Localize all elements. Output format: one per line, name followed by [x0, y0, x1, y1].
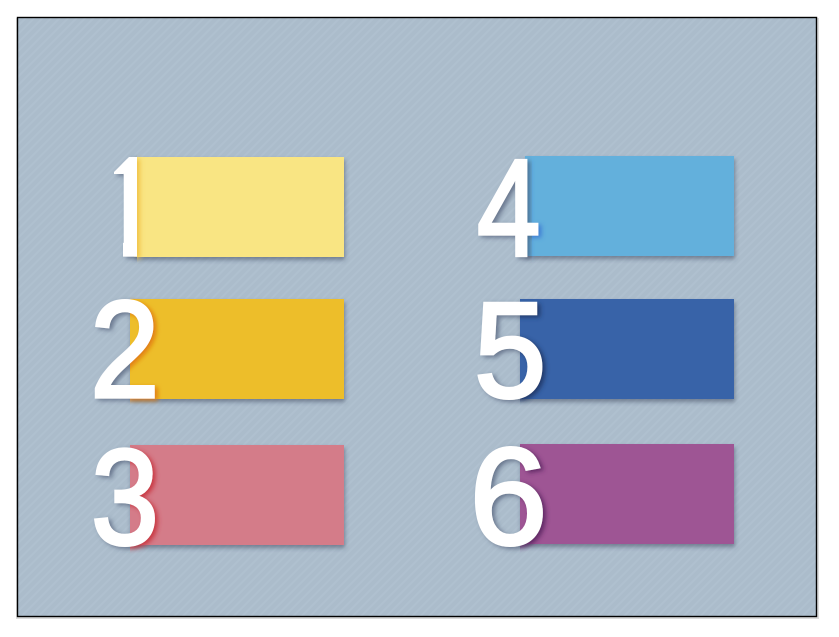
panel 2: golden yellow [130, 299, 344, 399]
number 4: 4 [477, 130, 540, 285]
panel 3: rose pink [130, 445, 344, 545]
panel 1: pale yellow [134, 157, 344, 257]
panel 5: royal blue [520, 299, 734, 399]
number 1: 1 [95, 128, 162, 285]
number 2: 2 [90, 272, 160, 426]
panel 4: sky blue [525, 156, 734, 256]
panel 6: purple [520, 444, 734, 544]
number 3: 3 [91, 422, 159, 573]
number 6: 6 [470, 420, 547, 574]
number 5: 5 [474, 275, 546, 427]
